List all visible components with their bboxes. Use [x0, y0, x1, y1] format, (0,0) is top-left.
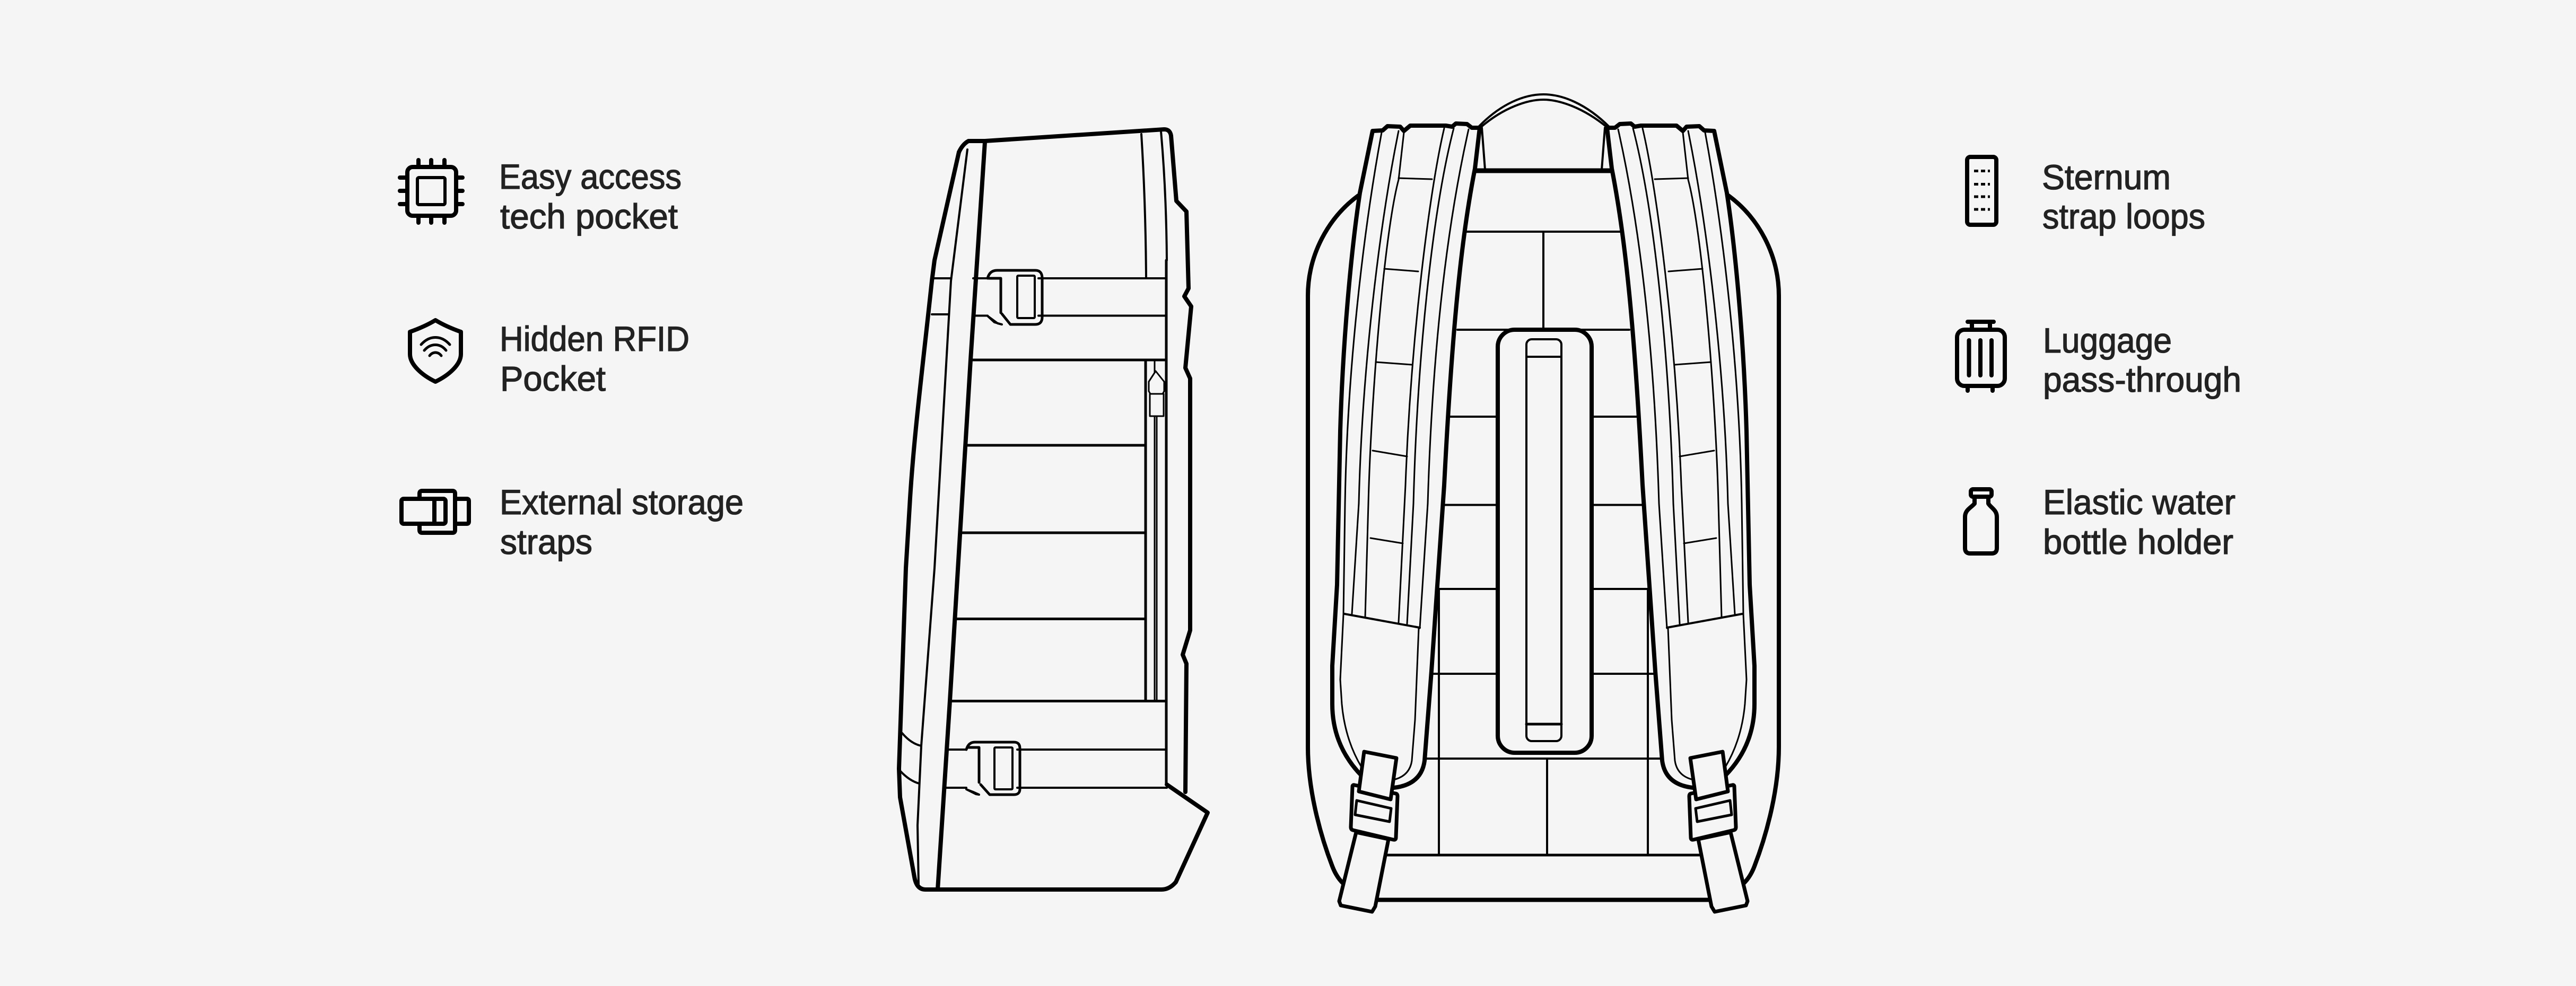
- label: sternum strap loops: Sternum: [2042, 157, 2171, 197]
- side view outer silhouette: [959, 129, 1191, 792]
- label: easy access tech pocket: [499, 157, 682, 236]
- side view back panel outline: [899, 152, 1208, 890]
- top yoke: [1475, 169, 1612, 173]
- rear body outline: [1308, 196, 1358, 884]
- yoke side lines: [1482, 128, 1605, 170]
- left feature list: [400, 157, 744, 561]
- upper webbing: [1359, 752, 1396, 799]
- backpack side view: [899, 129, 1208, 890]
- base panel: [1378, 898, 1709, 902]
- label: hidden RFID pocket: Pocket: [500, 359, 606, 398]
- feature: external storage straps: [401, 482, 744, 561]
- strap padding bars: [1370, 178, 1432, 543]
- webbing tail: [1339, 832, 1389, 912]
- sternum strap panel: [1498, 330, 1592, 753]
- buckle window: [1355, 800, 1391, 822]
- label: hidden RFID pocket: [500, 319, 689, 398]
- label: easy access tech pocket: tech pocket: [500, 197, 678, 236]
- side view inner vertical line: [1165, 260, 1168, 785]
- icon: water bottle: [1965, 489, 1997, 553]
- icon: chip: [400, 160, 462, 223]
- icon: strap buckle: [401, 491, 469, 533]
- strap outline: [1332, 124, 1480, 788]
- lower buckle: [966, 742, 1020, 795]
- label: external storage straps: straps: [500, 522, 592, 561]
- right feature list: [1957, 157, 2241, 561]
- feature: luggage pass-through: [1957, 321, 2241, 399]
- label: external storage straps: External storage: [500, 482, 744, 522]
- label: elastic water bottle holder: Elastic water: [2043, 482, 2236, 522]
- icon: suitcase: [1957, 322, 2005, 391]
- back panel grid: [1387, 232, 1699, 855]
- strap pad lower section: [1344, 614, 1420, 628]
- upper buckle: [988, 270, 1042, 324]
- label: elastic water bottle holder: bottle holder: [2043, 522, 2233, 561]
- label: hidden RFID pocket: Hidden RFID: [500, 319, 689, 358]
- backpack rear view: [1308, 94, 1779, 912]
- rear body outline right side: [1728, 196, 1779, 884]
- feature: easy access tech pocket: [400, 157, 682, 236]
- label: sternum strap loops: [2042, 157, 2205, 236]
- right shoulder strap: [1607, 124, 1754, 912]
- zipper with pull: [1149, 360, 1164, 701]
- label: elastic water bottle holder: [2043, 482, 2236, 561]
- side panel lines: [932, 131, 1167, 788]
- label: luggage pass-through: [2043, 321, 2241, 399]
- front panel edges: [901, 142, 985, 890]
- label: luggage pass-through: pass-through: [2043, 360, 2241, 399]
- feature: hidden RFID pocket: [410, 319, 689, 398]
- strap stitching: [1343, 128, 1469, 628]
- feature: elastic water bottle holder: [1965, 482, 2236, 561]
- label: sternum strap loops: strap loops: [2042, 197, 2205, 236]
- icon: RFID shield: [410, 320, 461, 382]
- label: luggage pass-through: Luggage: [2043, 321, 2172, 360]
- ladder lock buckle: [1351, 785, 1398, 840]
- label: external storage straps: [500, 482, 744, 561]
- top handle: [1478, 94, 1610, 127]
- icon: sternum loops: [1967, 157, 1996, 225]
- feature: sternum strap loops: [1967, 157, 2205, 236]
- left shoulder strap: [1332, 124, 1480, 912]
- label: easy access tech pocket: Easy access: [499, 157, 682, 196]
